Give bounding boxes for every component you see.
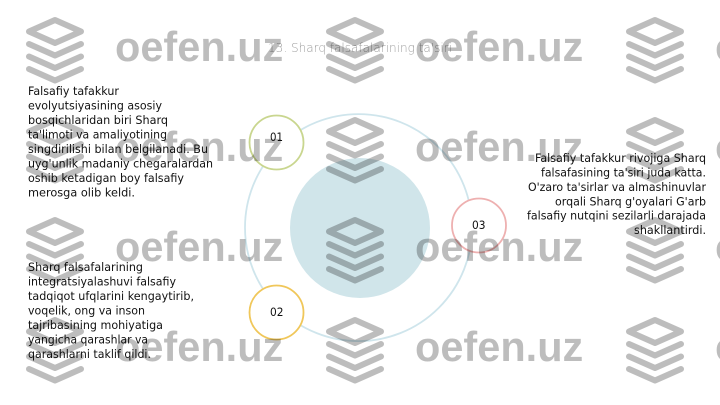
text block: bottom left: voqelik, ong va inson [28,304,145,318]
text block: top left: oshib ketadigan boy falsafiy [28,171,184,185]
text block: bottom left: qarashlarni taklif qildi. [28,347,151,361]
text block: top left: singdirilishi bilan belgilanadi. Bu [28,142,208,156]
node 02 [250,286,304,340]
node 03: 03 [472,218,486,232]
text block: right: falsafasining ta'siri juda katta. [541,166,706,180]
diagram: orbit with numbered circles [245,114,506,341]
text block: right [527,151,706,237]
outer orbit ring [245,114,472,341]
text block: right: O'zaro ta'sirlar va almashinuvlar [528,180,706,194]
node 01 [250,116,304,170]
text block: bottom left: tadqiqot ufqlarini kengaytirib, [28,289,194,303]
text block: right: Falsafiy tafakkur rivojiga Sharq [535,151,706,165]
text block: bottom left: tajribasining mohiyatiga [28,318,163,332]
text block: top left: bosqichlaridan biri Sharq [28,113,168,127]
text block: bottom left: Sharq falsafalarining [28,260,143,274]
title: 13. Sharq falsafalarining ta'siri [268,41,452,55]
text block: right: orqali Sharq g'oyalari G'arb [555,194,706,208]
node 02: 02 [270,305,284,319]
text block: top left: Falsafiy tafakkur [28,84,119,98]
text block: bottom left: yangicha qarashlar va [28,332,148,346]
node 03 [452,198,506,252]
text block: top left: uyg'unlik madaniy chegaralardan [28,156,213,170]
text block: bottom left: integratsiyalashuvi falsafiy [28,274,176,288]
text block: right: falsafiy nutqini sezilarli darajada [527,208,706,222]
text block: top left: evolyutsiyasining asosiy [28,98,162,112]
text block: top left: merosga olib keldi. [28,186,135,200]
text block: top left [28,84,213,200]
text block: right: shakllantirdi. [634,223,706,237]
central circle [290,158,430,298]
text block: bottom left [28,260,194,361]
text block: top left: ta'limoti va amaliyotining [28,128,167,142]
node 01: 01 [270,130,283,144]
